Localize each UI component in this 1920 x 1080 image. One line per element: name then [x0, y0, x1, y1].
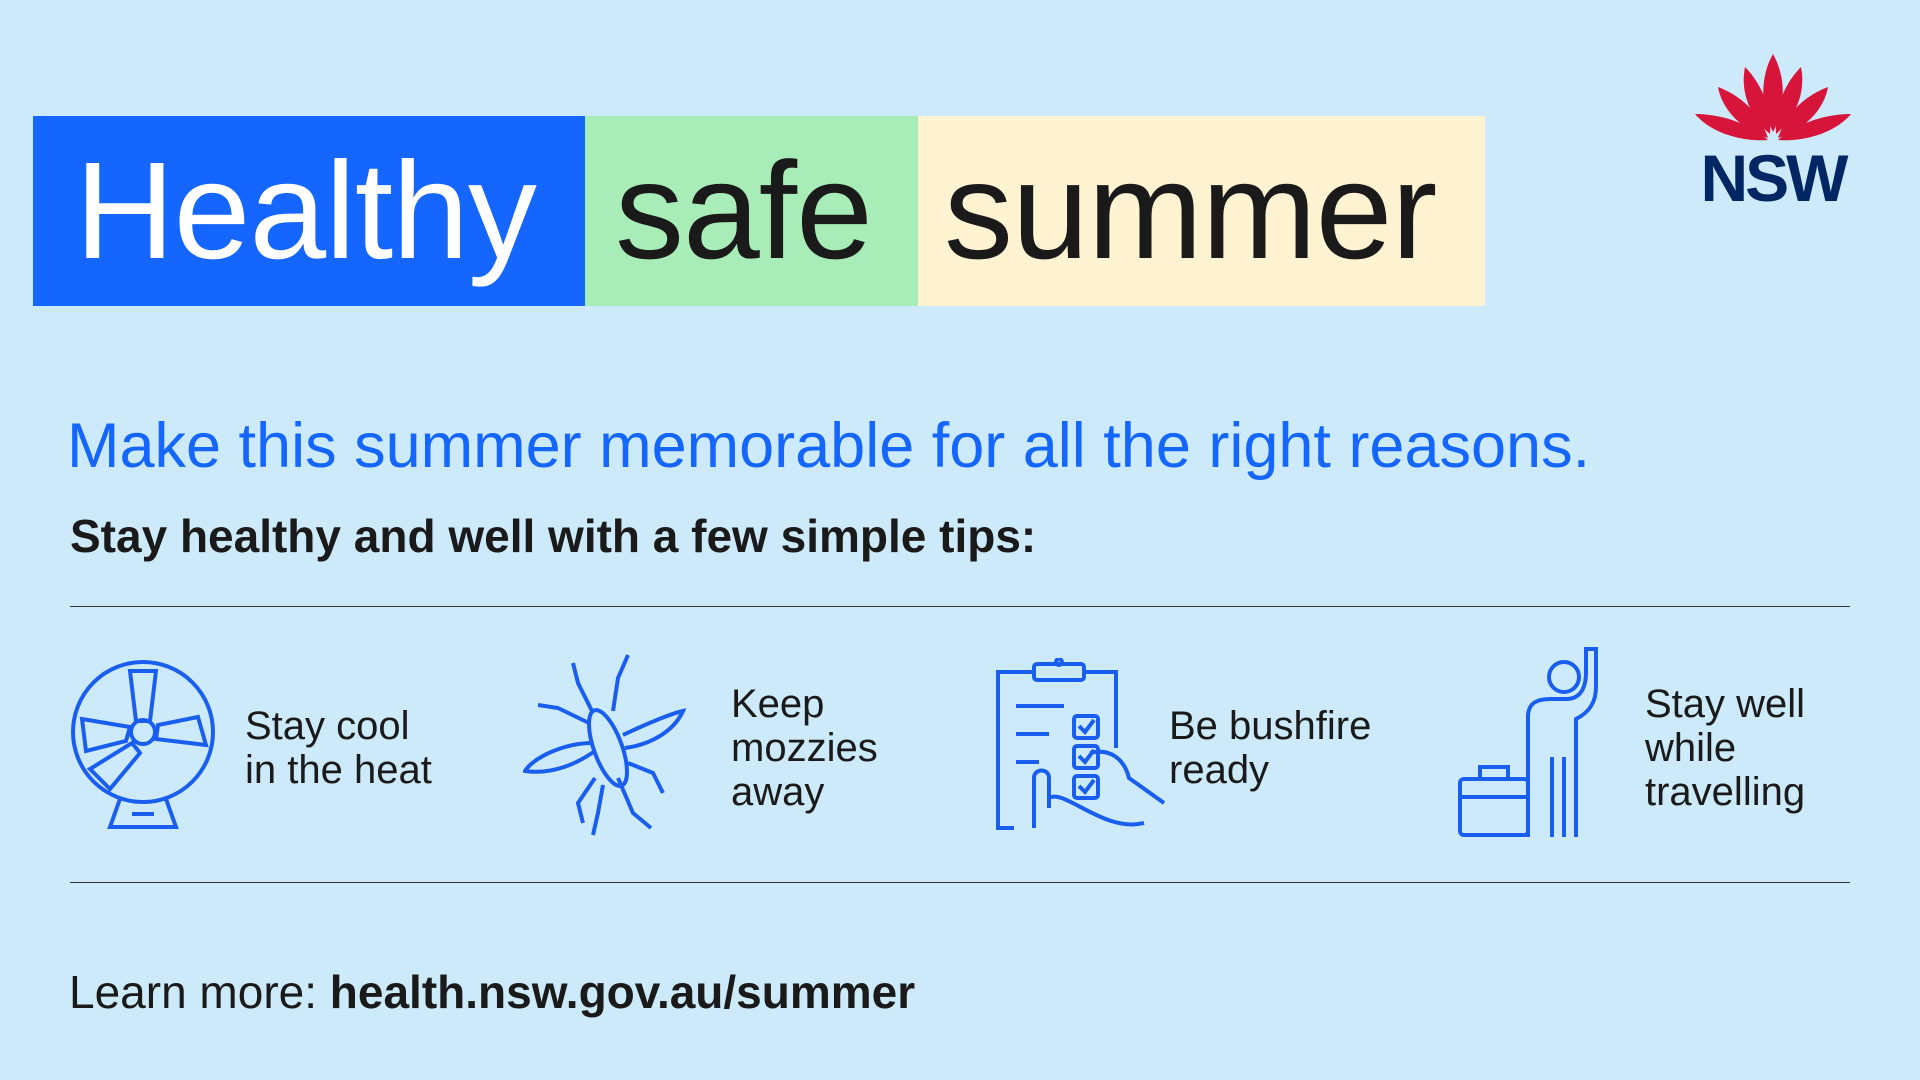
- label: bushfire: [1169, 704, 1371, 792]
- tips row: [71, 647, 1805, 837]
- title: summer: summer: [944, 134, 1436, 288]
- label: keep mozzies away: Keep: [731, 682, 824, 726]
- icon: traveller: [1458, 647, 1598, 837]
- label: keep mozzies away: mozzies: [731, 726, 878, 770]
- icon: mosquito: [523, 654, 686, 836]
- footer: Learn more: health.nsw.gov.au/summer: [69, 966, 915, 1018]
- label: travelling: Stay well: [1645, 682, 1805, 726]
- icon: clipboard: [996, 658, 1166, 830]
- label: travelling: [1645, 682, 1805, 814]
- NSW logo: NSW: [1700, 141, 1845, 215]
- label: travelling: while: [1645, 726, 1736, 770]
- intro text: Stay healthy and well with a few simple tips:: [70, 510, 1036, 562]
- title: safe: safe: [615, 134, 872, 288]
- title: [33, 116, 1485, 306]
- title: safe: [585, 116, 918, 306]
- subtitle: Make this summer memorable for all the right reasons.: [67, 411, 1590, 481]
- label: stay cool: [245, 704, 432, 792]
- label: bushfire: ready: [1169, 748, 1269, 792]
- title: Healthy: [33, 116, 585, 306]
- NSW logo: [1695, 54, 1851, 215]
- title: Healthy: Healthy: [75, 134, 536, 288]
- label: keep mozzies away: [731, 682, 878, 814]
- icon: fan: [71, 660, 215, 829]
- label: keep mozzies away: away: [731, 770, 824, 814]
- label: bushfire: Be bushfire: [1169, 704, 1371, 748]
- label: travelling: travelling: [1645, 770, 1805, 814]
- label: stay cool: in the heat: [245, 748, 432, 792]
- label: stay cool: Stay cool: [245, 704, 410, 748]
